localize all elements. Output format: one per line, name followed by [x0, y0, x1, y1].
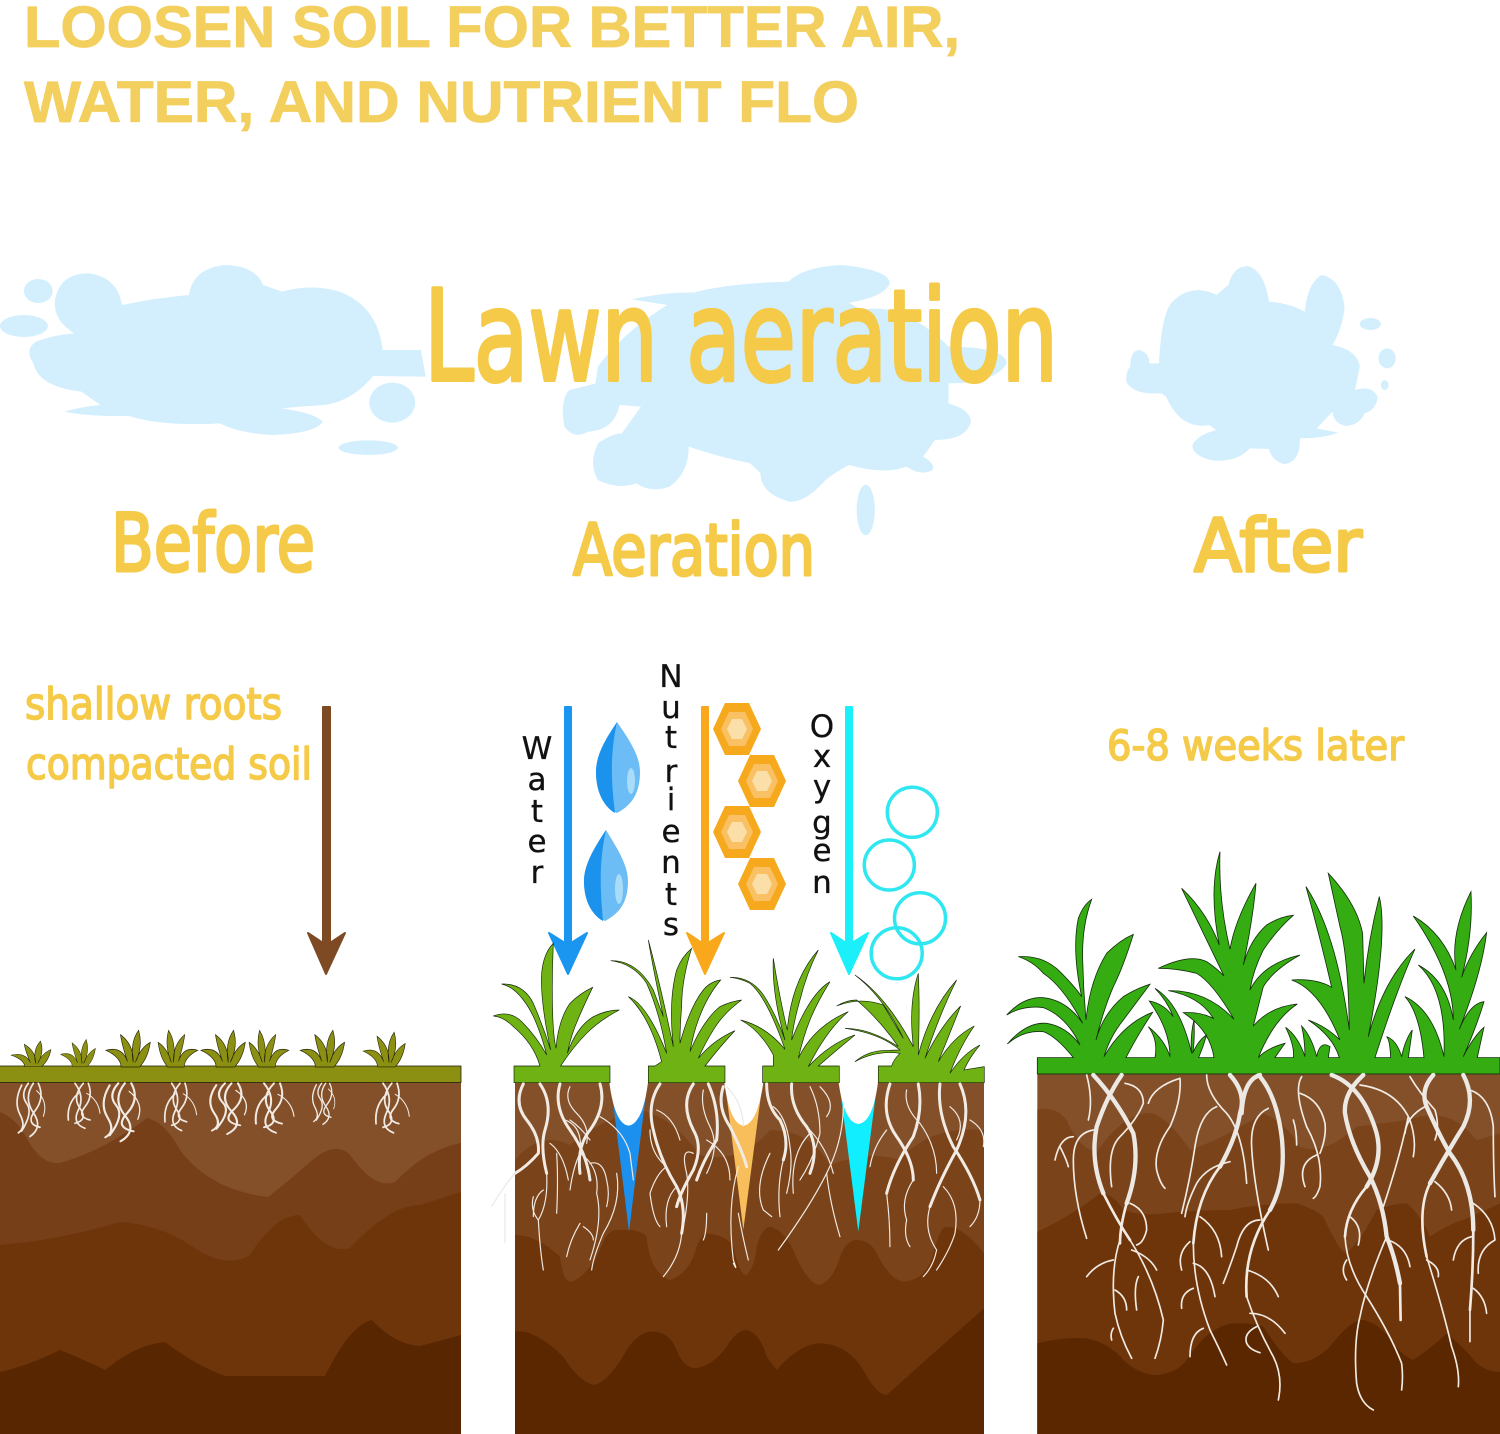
- caption: 6-8 weeks later: 6-8 weeks later: [1107, 721, 1405, 770]
- label: oxygen: y: [813, 769, 831, 805]
- label: nutrients: i: [667, 782, 675, 818]
- label: nutrients: e: [661, 814, 681, 850]
- roots: after: [1055, 1075, 1495, 1410]
- label: water: r: [531, 855, 544, 891]
- label: water: [522, 731, 552, 891]
- label: aeration: Aeration: [573, 509, 815, 592]
- heading: loosen soil: [24, 0, 960, 135]
- title: lawn aeration: Lawn aeration: [424, 263, 1058, 410]
- grass strip: before: [0, 1066, 461, 1082]
- caption: shallow roots compacted soil: [25, 679, 312, 790]
- label: oxygen: n: [812, 865, 832, 901]
- label: nutrients: u: [661, 690, 681, 726]
- arrow: water: [549, 707, 587, 974]
- clouds behind title: [0, 265, 1396, 535]
- label: nutrients: n: [661, 845, 681, 881]
- grass: aeration: [493, 940, 984, 1083]
- soil: after: [1037, 1074, 1500, 1434]
- shallow roots: [17, 1083, 409, 1141]
- heading: loosen soil: WATER, AND NUTRIENT FLO: [24, 70, 859, 135]
- roots: aeration: [515, 1084, 984, 1277]
- icon: nutrient hexagons: [713, 703, 786, 910]
- label: after: After: [1194, 504, 1363, 589]
- label: nutrients: r: [665, 754, 678, 790]
- arrow: brown: [308, 707, 345, 974]
- soil: before: [0, 1082, 461, 1434]
- label: nutrients: [659, 659, 683, 943]
- label: oxygen: O: [810, 709, 834, 745]
- label: nutrients: N: [659, 659, 683, 695]
- icon: oxygen bubbles: [864, 787, 946, 979]
- panel: aeration: [492, 940, 984, 1434]
- label: water: a: [528, 762, 546, 798]
- hole: water: [609, 1063, 648, 1232]
- label: nutrients: t: [665, 720, 677, 756]
- grass tufts: before: [11, 1030, 405, 1067]
- grass: after: [1007, 852, 1500, 1074]
- label: oxygen: [810, 709, 834, 901]
- cloud: left: [0, 265, 426, 455]
- cloud: middle: [563, 265, 1007, 535]
- soil: aeration: [515, 1082, 984, 1434]
- label: water: t: [531, 794, 543, 830]
- label: nutrients: t: [665, 877, 677, 913]
- panel: before: [0, 1030, 461, 1434]
- faint roots outside panel: [492, 1087, 743, 1243]
- label: nutrients: s: [663, 907, 679, 943]
- label: oxygen: x: [813, 739, 831, 775]
- arrow: oxygen: [831, 707, 868, 974]
- arrow: nutrients: [687, 707, 724, 974]
- label: oxygen: e: [812, 833, 832, 869]
- hole: oxygen: [839, 1063, 878, 1232]
- cloud: right: [1126, 266, 1396, 464]
- hole: nutrients: [724, 1063, 763, 1230]
- label: before: Before: [111, 497, 315, 590]
- aeration holes: [609, 1063, 878, 1232]
- panel: after: [1007, 852, 1500, 1434]
- label: water: e: [527, 824, 547, 860]
- icon: water drops: [584, 722, 640, 921]
- label: oxygen: g: [812, 805, 832, 841]
- label: water: W: [522, 731, 552, 767]
- caption: shallow roots compacted soil: compacted soil: [26, 739, 312, 790]
- caption: shallow roots compacted soil: shallow roots: [25, 679, 282, 730]
